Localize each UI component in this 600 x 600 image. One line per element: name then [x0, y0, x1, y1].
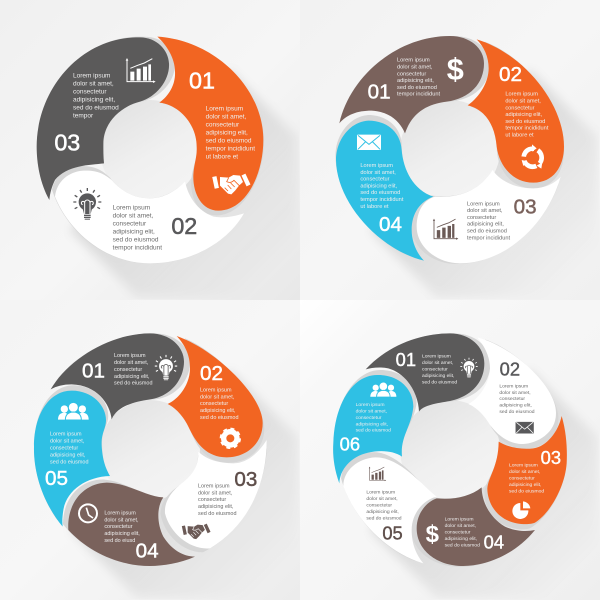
segment 02 orange: sed do eiusmod	[505, 119, 545, 125]
segment 02 orange: 02	[499, 63, 522, 86]
segment 04 brown: adipisicing elit,	[104, 531, 140, 537]
segment 03 orange: dolor sit amet,	[509, 469, 540, 475]
segment 01 brown: tempor incididunt	[397, 92, 441, 98]
segment 03 white: sed do eiusmod	[467, 229, 507, 235]
segment 05 cyan: 05	[45, 467, 68, 490]
segment 02 orange: sed do eiusmod	[200, 415, 238, 421]
segment 02 orange: dolor sit amet,	[505, 98, 541, 104]
segment 03 grey: adipisicing elit,	[73, 96, 115, 103]
segment 05 white: dolor sit amet,	[366, 496, 398, 502]
segment 04 brown: Lorem ipsum	[445, 517, 473, 523]
segment 01 grey	[366, 333, 484, 412]
segment 01 brown: sed do eiusmod	[397, 85, 437, 91]
segment 03 grey: 03	[54, 129, 80, 155]
panel: six-step cycle	[325, 325, 597, 597]
segment 05 white: Lorem ipsum	[366, 490, 395, 496]
segment 02 white	[468, 337, 556, 444]
segment 03 white: Lorem ipsum	[198, 483, 230, 489]
segment 04 cyan: adipisicing elit,	[360, 183, 398, 189]
segment 01 grey: Lorem ipsum	[114, 353, 146, 359]
segment 01 grey: sed do eiusmod	[114, 381, 152, 387]
segment 04 brown: consectetur	[104, 524, 133, 530]
segment 03 white: consectetur	[467, 215, 496, 221]
segment 03 orange	[487, 416, 567, 524]
segment 04 brown: dolor sit amet,	[104, 517, 139, 523]
segment 03 grey: consectetur	[73, 88, 107, 95]
segment 03 orange: adipisicing elit,	[509, 482, 541, 488]
segment 03 grey: dolor sit amet,	[73, 80, 114, 87]
segment 01 brown: 01	[368, 80, 391, 103]
segment 04 brown	[417, 487, 535, 566]
segment 02 white: adipisicing elit,	[113, 228, 155, 235]
segment 02 orange: Lorem ipsum	[200, 387, 232, 393]
segment 04 brown: sed do eiusmod	[445, 542, 480, 548]
segment 04 brown	[68, 483, 195, 566]
segment 01 grey: dolor sit amet,	[422, 360, 453, 366]
segment 05 white: sed do eiusmod	[366, 515, 402, 521]
segment 05 white: adipisicing elit,	[366, 509, 399, 515]
segment 02 white: dolor sit amet,	[499, 390, 531, 396]
segment 03 white: adipisicing elit,	[198, 504, 234, 510]
segment 02 white: dolor sit amet,	[113, 212, 154, 219]
segment 02 orange: Lorem ipsum	[505, 92, 538, 98]
segment 01 orange: Lorem ipsum	[206, 106, 243, 113]
segment 04 brown: $	[426, 521, 439, 548]
segment 03 grey	[37, 37, 169, 200]
segment 02 white: tempor incididunt	[113, 244, 162, 251]
segment 01 grey	[51, 333, 184, 419]
segment 03 white: 03	[234, 468, 257, 491]
segment 01 orange: adipisicing elit,	[206, 130, 248, 137]
segment 02 orange: dolor sit amet,	[200, 394, 235, 400]
segment 03 white: sed do eiusmod	[198, 511, 236, 517]
segment 02 white: Lorem ipsum	[113, 204, 150, 211]
segment 06 cyan: Lorem ipsum	[356, 402, 384, 408]
segment 02 orange: consectetur	[200, 401, 228, 407]
segment 03 grey: Lorem ipsum	[73, 72, 110, 79]
segment 06 cyan: dolor sit amet,	[356, 408, 387, 414]
segment 02 white	[55, 171, 244, 263]
segment 02 orange: 02	[200, 362, 223, 385]
segment 05 cyan: sed do eiusmod	[50, 459, 88, 465]
segment 02 orange: adipisicing elit,	[505, 112, 543, 118]
segment 03 white: dolor sit amet,	[198, 490, 233, 496]
segment 06 cyan	[333, 375, 413, 483]
segment 01 orange: consectetur	[206, 122, 240, 129]
segment 03 grey: tempor	[73, 112, 94, 119]
segment 01 grey: dolor sit amet,	[114, 360, 149, 366]
segment 01 grey: consectetur	[422, 367, 448, 373]
segment 01 orange: 01	[189, 68, 215, 94]
segment 03 orange: consectetur	[509, 476, 535, 482]
segment 06 cyan: 06	[340, 434, 360, 455]
segment 02 orange: ut labore et	[505, 132, 534, 138]
segment 04 brown: dolor sit amet,	[445, 523, 476, 529]
segment 02 orange: adipisicing elit,	[200, 408, 236, 414]
segment 03 grey: sed do eiusmod	[73, 104, 119, 111]
segment 01 orange: dolor sit amet,	[206, 114, 247, 121]
segment 04 brown: sed do eiusd	[104, 538, 135, 544]
segment 01 brown: $	[447, 52, 464, 86]
segment 04 brown: consectetur	[445, 530, 471, 536]
panel: four-step cycle	[328, 28, 597, 297]
segment 01 orange: ut labore et	[206, 154, 238, 161]
segment 01 brown: dolor sit amet,	[397, 64, 433, 70]
segment 03 white: tempor incididunt	[467, 235, 511, 241]
segment 06 cyan: consectetur	[356, 415, 382, 421]
segment 04 cyan: dolor sit amet,	[360, 170, 396, 176]
panel: three-step cycle	[29, 29, 297, 297]
segment 01 brown: consectetur	[397, 71, 426, 77]
segment 04 cyan: 04	[379, 213, 402, 236]
segment 04 brown: 04	[136, 539, 159, 562]
segment 02 orange	[168, 336, 263, 457]
segment 04 cyan: consectetur	[360, 177, 390, 183]
panel: five-step cycle	[26, 326, 297, 597]
segment 03 white	[165, 440, 267, 548]
segment 02 orange	[468, 39, 564, 183]
segment 03 orange: Lorem ipsum	[509, 463, 538, 469]
segment 01 orange: sed do eiusmod	[206, 138, 252, 145]
segment 03 orange: 03	[541, 447, 561, 468]
segment 02 orange: consectetur	[505, 105, 535, 111]
segment 01 grey: sed do eiusmod	[422, 379, 457, 385]
segment 05 white: consectetur	[366, 503, 392, 509]
segment 04 cyan: Lorem ipsum	[360, 163, 393, 169]
segment 05 cyan: adipisicing elit,	[50, 452, 86, 458]
segment 04 brown: Lorem ipsum	[104, 510, 136, 516]
segment 01 brown	[339, 36, 484, 133]
segment 02 white: consectetur	[499, 396, 525, 402]
segment 06 cyan: adipisicing elit,	[356, 421, 388, 427]
segment 01 brown: Lorem ipsum	[397, 58, 430, 64]
segment 01 orange: tempor incididunt	[206, 146, 255, 153]
segment 02 white: sed do eiusmod	[499, 409, 535, 415]
segment 04 cyan: sed do eiusmod	[360, 190, 400, 196]
segment 03 white: adipisicing elit,	[467, 222, 504, 228]
segment 04 cyan: tempor incididunt	[360, 197, 404, 203]
segment 02 white: 02	[500, 359, 520, 380]
segment 01 grey: 01	[82, 360, 105, 383]
segment 02 white: 02	[171, 213, 197, 239]
segment 01 grey: Lorem ipsum	[422, 354, 451, 360]
segment 03 white: 03	[514, 196, 537, 219]
segment 05 white	[343, 457, 437, 563]
segment 04 cyan: ut labore et	[360, 204, 389, 210]
segment 05 cyan	[34, 391, 110, 527]
segment 02 white: sed do eiusmod	[113, 236, 159, 243]
segment 05 cyan: Lorem ipsum	[50, 432, 82, 438]
segment 01 orange	[157, 37, 263, 211]
segment 04 brown: adipisicing elit,	[445, 536, 477, 542]
segment 02 white: consectetur	[113, 220, 147, 227]
segment 06 cyan: sed do eiusmod	[356, 428, 391, 434]
segment 03 white: Lorem ipsum	[467, 201, 500, 207]
segment 05 cyan: consectetur	[50, 446, 78, 452]
segment 01 brown: adipisicing elit,	[397, 78, 434, 84]
segment 02 white: Lorem ipsum	[499, 383, 528, 389]
segment 03 white	[417, 170, 561, 263]
segment 01 grey: adipisicing elit,	[114, 374, 150, 380]
segment 01 grey: consectetur	[114, 367, 142, 373]
segment 04 cyan	[336, 121, 433, 261]
segment 04 brown: 04	[484, 531, 504, 552]
segment 02 orange: tempor incididunt	[505, 126, 549, 132]
segment 01 grey: 01	[396, 349, 416, 370]
segment 03 orange: sed do eiusmod	[509, 488, 544, 494]
segment 01 grey: adipisicing elit,	[422, 373, 454, 379]
segment 05 cyan: dolor sit amet,	[50, 439, 85, 445]
segment 03 white: dolor sit amet,	[467, 208, 503, 214]
segment 03 white: consectetur	[198, 497, 226, 503]
segment 02 white: adipisicing elit,	[499, 403, 532, 409]
segment 05 white: 05	[382, 522, 403, 543]
